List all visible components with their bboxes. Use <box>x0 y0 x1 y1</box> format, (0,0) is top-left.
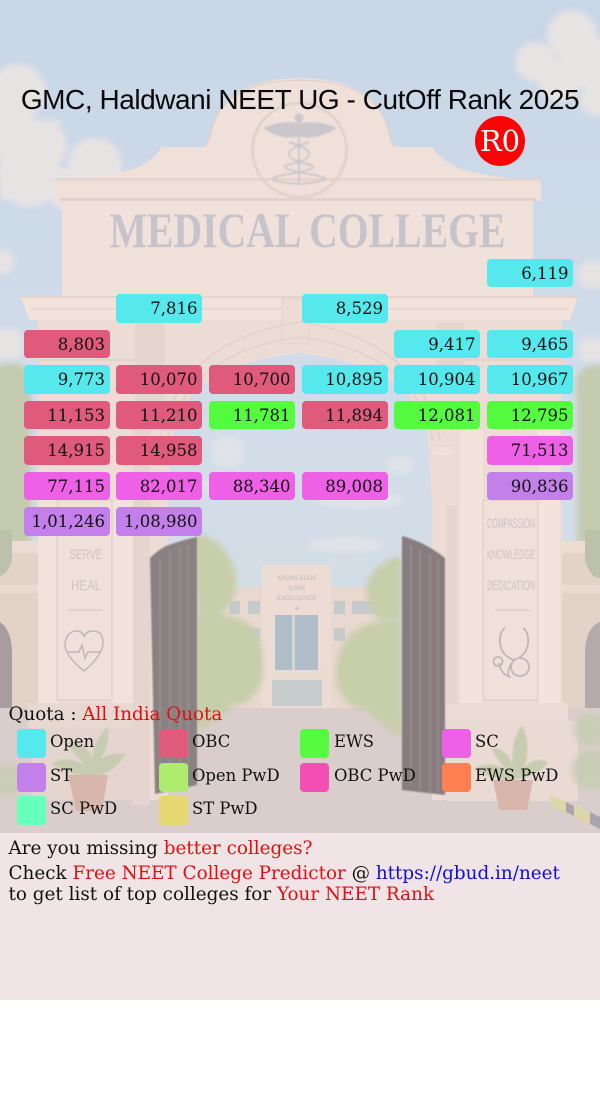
cutoff rank table: 11,153 <box>47 406 105 424</box>
cutoff rank table: 12,795 <box>511 406 568 424</box>
cutoff rank table: 10,904 <box>418 370 476 389</box>
cutoff rank table: 71,513 <box>511 441 568 460</box>
engraved college name: MEDICAL COLLEGE <box>110 202 506 258</box>
pier shading <box>133 323 464 805</box>
cutoff rank table: 1,08,980 <box>124 512 198 531</box>
arch moulding <box>35 322 565 440</box>
round badge: R0 <box>475 116 525 166</box>
pillar inscriptions: SERVE <box>70 546 102 562</box>
cutoff rank table: 89,008 <box>325 476 383 496</box>
distant campus building <box>222 565 378 712</box>
cutoff rank table: 77,115 <box>47 476 105 496</box>
clouds seen through the arch <box>197 436 414 552</box>
cutoff rank table: 6,119 <box>521 264 568 282</box>
legend: EWS PwD <box>475 766 558 784</box>
cutoff rank table: 90,836 <box>511 476 568 496</box>
avenue trees <box>195 535 402 738</box>
cutoff rank table: 8,529 <box>336 299 383 318</box>
side wings <box>0 530 600 801</box>
pillar inscriptions: KNOWLEDGE <box>487 546 535 562</box>
quota line: Quota : All India Quota <box>8 704 222 725</box>
legend: OBC <box>192 732 230 751</box>
legend: EWS <box>334 732 374 751</box>
crest: caduceus medallion <box>252 103 346 197</box>
legend: SC PwD <box>50 799 117 818</box>
cutoff rank table: 10,895 <box>325 370 383 389</box>
legend: OBC PwD <box>334 766 416 784</box>
predictor call to action: to get list of top colleges for Your NEET Rank <box>8 884 434 904</box>
sky <box>0 0 600 720</box>
legend: ST <box>50 766 72 784</box>
predictor call to action: Check Free NEET College Predictor @ https://gbud.in/neet <box>8 862 560 884</box>
cutoff rank table: 88,340 <box>233 476 290 496</box>
roadside shrubs <box>0 714 600 795</box>
promo panel <box>0 833 600 1000</box>
pier bases <box>28 703 578 801</box>
cutoff rank table: 9,465 <box>521 334 568 354</box>
distant campus building: EXCELLENCE <box>277 596 317 602</box>
cutoff rank table: 1,01,246 <box>32 512 105 531</box>
icon: stethoscope <box>494 628 529 677</box>
cutoff rank table: 9,773 <box>58 370 105 389</box>
icon: heart with pulse <box>65 631 103 671</box>
potted plants <box>52 726 548 811</box>
cutoff rank table: 14,915 <box>47 441 105 460</box>
cutoff rank table: 10,967 <box>511 370 568 389</box>
distant campus building: + <box>294 604 300 615</box>
gate structure <box>20 78 578 805</box>
iron gates <box>150 536 445 795</box>
pier panels <box>38 430 560 710</box>
title: GMC, Haldwani NEET UG - CutOff Rank 2025 <box>21 84 579 115</box>
pillar inscriptions: COMPASSION <box>487 515 535 531</box>
cutoff rank table: 9,417 <box>428 334 476 354</box>
pillar inscriptions <box>70 515 535 593</box>
legend: SC <box>475 732 499 751</box>
cutoff rank table: 10,700 <box>233 370 290 389</box>
side trees <box>0 363 600 545</box>
legend: Open <box>50 732 94 751</box>
cutoff rank table: 7,816 <box>150 299 198 318</box>
clouds <box>0 10 600 363</box>
distant campus building: KNOWLEDGE <box>277 576 317 582</box>
legend: Open PwD <box>192 766 280 784</box>
cutoff rank table: 10,070 <box>140 370 198 389</box>
legend: ST PwD <box>192 799 258 818</box>
cutoff rank table: 82,017 <box>140 476 198 496</box>
promo heading: Are you missing better colleges? <box>8 838 312 858</box>
arch body with opening <box>38 320 562 800</box>
lintel cornice <box>20 296 578 320</box>
predictor call to action <box>8 862 560 904</box>
cutoff rank table: 12,081 <box>418 406 476 424</box>
cutoff rank table: 11,894 <box>325 406 383 424</box>
cutoff rank table: 11,210 <box>140 406 198 424</box>
legend <box>17 729 558 825</box>
cutoff rank table: 11,781 <box>233 406 290 424</box>
pillar inscriptions: DEDICATION <box>487 577 535 593</box>
pillar inscriptions: HEAL <box>71 577 101 593</box>
round badge: R0: R0 <box>480 124 520 158</box>
arch inner columns <box>147 447 453 455</box>
ground and path <box>0 708 600 835</box>
kerb stripes <box>550 795 600 829</box>
cutoff rank table <box>24 259 573 536</box>
cutoff rank table: 8,803 <box>58 334 105 354</box>
cutoff rank table: 14,958 <box>140 441 198 460</box>
pediment and upper wall <box>55 78 541 201</box>
distant campus building: CARE <box>289 586 305 592</box>
